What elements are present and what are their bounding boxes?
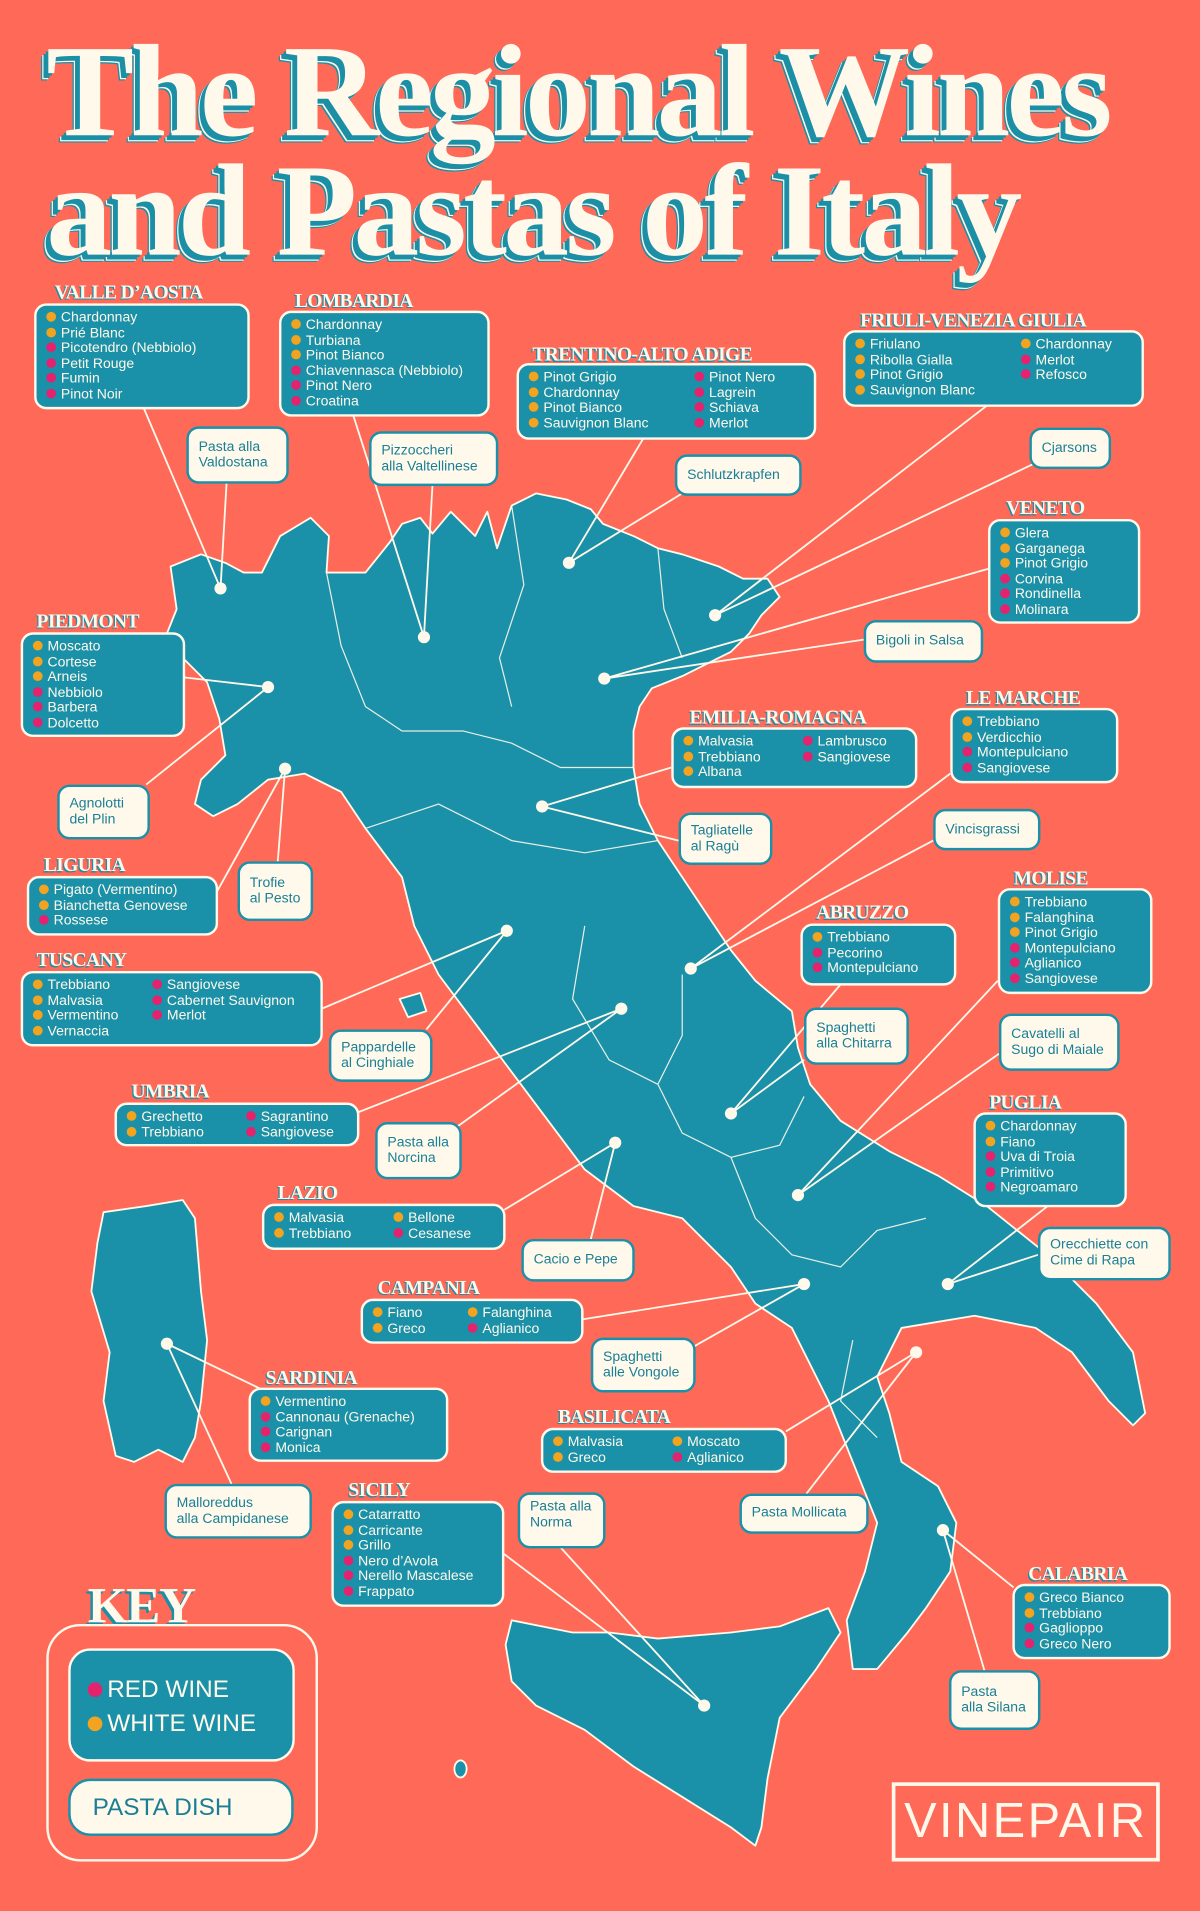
pasta: orecchiette: Cime di Rapa xyxy=(1050,1254,1135,1268)
pasta: chitarra: Spaghetti xyxy=(816,1020,875,1035)
pasta: pappardelle: al Cinghiale xyxy=(341,1056,414,1070)
title: The Regional Wines xyxy=(46,19,1109,164)
logo: vinepair xyxy=(892,1782,1160,1862)
panel: puglia: Primitivo xyxy=(1000,1165,1054,1180)
pasta: agnolotti xyxy=(57,785,150,839)
pasta: malloreddus: alla Campidanese xyxy=(177,1511,289,1526)
pasta: trofie: Trofie xyxy=(250,875,285,890)
pasta: cjarsons: Cjarsons xyxy=(1042,440,1097,455)
panel: le marche: Trebbiano xyxy=(977,715,1040,730)
panel: le marche: Montepulciano xyxy=(977,746,1068,760)
panel: puglia: Chardonnay xyxy=(1000,1120,1077,1134)
panel: molise: Pinot Grigio xyxy=(1025,926,1098,941)
pasta: tagliatelle xyxy=(679,813,772,865)
panel: veneto: Garganega xyxy=(1015,542,1085,556)
pasta: valdostana: Valdostana xyxy=(199,455,268,470)
panel: lombardia: Chiavennasca (Nebbiolo) xyxy=(306,364,463,378)
panel: lombardia: Chardonnay xyxy=(306,318,382,333)
panel: molise: Falanghina xyxy=(1025,911,1094,925)
pasta: agnolotti: del Plin xyxy=(69,812,115,827)
panel: puglia: Fiano xyxy=(1000,1135,1035,1149)
panel: veneto: VENETO xyxy=(1006,498,1085,519)
panel: lombardia: Turbiana xyxy=(306,333,361,348)
panel: lombardia xyxy=(279,291,490,417)
panel: basilicata xyxy=(540,1407,787,1473)
pasta: norcina xyxy=(375,1122,462,1179)
panel: veneto: Glera xyxy=(1015,526,1049,541)
key: wine legend xyxy=(68,1648,295,1762)
panel: calabria: Greco Bianco xyxy=(1039,1591,1124,1606)
panel: sicily: Frappato xyxy=(358,1584,414,1599)
pasta: schlutzkrapfen xyxy=(675,454,802,496)
pasta: cavatelli: Sugo di Maiale xyxy=(1011,1042,1104,1057)
panel: trentino-alto adige: Merlot xyxy=(709,416,748,431)
panel: molise: Sangiovese xyxy=(1025,972,1098,986)
pasta: norcina: Pasta alla xyxy=(387,1135,449,1149)
panel: sardinia xyxy=(248,1368,448,1462)
panel: lazio: Malvasia xyxy=(289,1211,344,1226)
pasta: silana: Pasta xyxy=(961,1684,997,1699)
panel: lombardia: LOMBARDIA xyxy=(295,291,413,312)
panel: tuscany: Malvasia xyxy=(48,993,103,1008)
panel: abruzzo: Pecorino xyxy=(827,946,883,961)
panel: lazio xyxy=(262,1183,506,1250)
panel: tuscany: Vernaccia xyxy=(48,1024,109,1039)
panel: campania: CAMPANIA xyxy=(378,1278,480,1299)
panel: sicily: Nero d’Avola xyxy=(358,1554,438,1569)
panel: emilia-romagna xyxy=(671,708,918,788)
key: pasta dish: PASTA DISH xyxy=(93,1795,232,1821)
panel: veneto: Molinara xyxy=(1015,602,1069,617)
key: wine legend: WHITE WINE xyxy=(107,1710,256,1737)
panel: calabria: Gaglioppo xyxy=(1039,1622,1103,1636)
panel: abruzzo: Montepulciano xyxy=(827,961,918,976)
pasta: tagliatelle: al Ragù xyxy=(691,839,739,853)
pasta: cacio e pepe: Cacio e Pepe xyxy=(534,1252,618,1267)
panel: molise: MOLISE xyxy=(1014,869,1088,889)
panel: emilia-romagna: EMILIA-ROMAGNA xyxy=(690,708,866,729)
pasta: vincisgrassi: Vincisgrassi xyxy=(945,822,1020,836)
panel: piedmont: Cortese xyxy=(48,655,97,669)
panel: basilicata: BASILICATA xyxy=(558,1407,670,1428)
panel: trentino-alto adige: Pinot Nero xyxy=(709,370,775,385)
panel: tuscany xyxy=(20,950,323,1046)
pasta: malloreddus: Malloreddus xyxy=(177,1495,253,1510)
pasta: cavatelli xyxy=(999,1014,1120,1071)
panel: friuli-venezia giulia: Merlot xyxy=(1036,353,1074,367)
pasta: norma xyxy=(518,1492,605,1548)
panel: basilicata: Malvasia xyxy=(568,1435,623,1450)
title xyxy=(41,19,1110,290)
pasta: cjarsons xyxy=(1029,428,1111,469)
panel: piedmont: Barbera xyxy=(48,701,97,715)
panel: calabria: Trebbiano xyxy=(1039,1606,1102,1621)
panel: sicily: Catarratto xyxy=(358,1508,420,1523)
panel: valle d'aosta: Fumin xyxy=(61,372,100,386)
panel: piedmont: Moscato xyxy=(48,640,100,654)
panel: piedmont xyxy=(20,612,186,737)
pasta: mollicata: Pasta Mollicata xyxy=(752,1506,847,1520)
panel: tuscany: Vermentino xyxy=(48,1009,118,1023)
panel: calabria: CALABRIA xyxy=(1028,1564,1127,1585)
pasta: orecchiette xyxy=(1038,1227,1171,1280)
panel: tuscany: Merlot xyxy=(167,1009,206,1023)
panel: sicily: SICILY xyxy=(348,1480,410,1501)
pasta: norma: Pasta alla xyxy=(530,1500,591,1514)
panel: tuscany: Sangiovese xyxy=(167,978,240,993)
panel: campania xyxy=(360,1278,584,1344)
panel: sicily: Grillo xyxy=(358,1539,391,1553)
panel: molise: Montepulciano xyxy=(1025,941,1116,956)
panel: umbria: UMBRIA xyxy=(132,1082,209,1103)
pasta: silana xyxy=(949,1670,1040,1730)
panel: piedmont: PIEDMONT xyxy=(37,612,139,632)
pasta: bigoli xyxy=(864,620,983,663)
pasta: norcina: Norcina xyxy=(387,1151,436,1165)
key xyxy=(46,1579,318,1862)
panel: lombardia: Pinot Nero xyxy=(306,379,372,394)
panel: sardinia: Vermentino xyxy=(275,1395,346,1410)
pasta: orecchiette: Orecchiette con xyxy=(1050,1238,1148,1252)
panel: friuli-venezia giulia: Ribolla Gialla xyxy=(870,353,952,367)
panel: piedmont: Nebbiolo xyxy=(48,685,103,700)
pasta: pizzoccheri xyxy=(369,431,498,486)
panel: veneto xyxy=(988,498,1140,624)
panel: emilia-romagna: Lambrusco xyxy=(817,735,887,749)
panel: le marche xyxy=(950,688,1118,784)
panel: liguria: Pigato (Vermentino) xyxy=(54,883,177,898)
panel: abruzzo xyxy=(800,903,956,986)
panel: campania: Falanghina xyxy=(482,1306,552,1321)
panel: trentino-alto adige: Pinot Grigio xyxy=(543,370,617,385)
panel: lazio: Trebbiano xyxy=(289,1226,351,1241)
panel: veneto: Pinot Grigio xyxy=(1015,557,1088,571)
panel: basilicata: Moscato xyxy=(687,1435,740,1450)
panel: liguria: Rossese xyxy=(54,914,108,928)
panel: valle d'aosta: VALLE D’AOSTA xyxy=(55,283,203,303)
logo: vinepair: VINEPAIR xyxy=(904,1795,1147,1848)
panel: lazio: Cesanese xyxy=(408,1226,471,1241)
pasta: norma: Norma xyxy=(530,1516,572,1530)
pasta: cavatelli: Cavatelli al xyxy=(1011,1026,1080,1041)
panel: emilia-romagna: Albana xyxy=(698,765,742,780)
key: pasta dish xyxy=(68,1779,294,1836)
pasta: vongole xyxy=(591,1338,696,1392)
panel: sardinia: SARDINIA xyxy=(266,1368,357,1389)
panel: umbria: Sagrantino xyxy=(261,1110,328,1124)
panel: calabria xyxy=(1012,1564,1171,1660)
panel: valle d'aosta xyxy=(34,283,250,410)
pasta: schlutzkrapfen: Schlutzkrapfen xyxy=(687,467,780,482)
panel: sardinia: Cannonau (Grenache) xyxy=(275,1410,415,1425)
panel: friuli-venezia giulia: Sauvignon Blanc xyxy=(870,383,975,398)
panel: tuscany: Cabernet Sauvignon xyxy=(167,993,295,1008)
pasta: pappardelle xyxy=(329,1029,432,1082)
panel: basilicata: Aglianico xyxy=(687,1450,744,1465)
panel: puglia: Negroamaro xyxy=(1000,1181,1078,1195)
panel: liguria: Bianchetta Genovese xyxy=(54,898,188,913)
panel: molise xyxy=(998,869,1152,994)
panel: friuli-venezia giulia: Refosco xyxy=(1036,368,1087,383)
panel: le marche: Verdicchio xyxy=(977,730,1042,745)
panel: abruzzo: ABRUZZO xyxy=(816,903,908,923)
panel: sicily: Nerello Mascalese xyxy=(358,1569,473,1584)
panel: valle d'aosta: Pinot Noir xyxy=(61,387,122,401)
panel: trentino-alto adige: Chardonnay xyxy=(543,386,620,400)
pasta: chitarra xyxy=(804,1008,909,1065)
panel: friuli-venezia giulia: Friulano xyxy=(870,337,920,352)
pasta: vongole: Spaghetti xyxy=(603,1349,662,1364)
panel: trentino-alto adige xyxy=(516,345,816,440)
pasta: pappardelle: Pappardelle xyxy=(341,1040,416,1054)
panel: trentino-alto adige: Pinot Bianco xyxy=(543,401,622,415)
pasta: mollicata xyxy=(739,1494,869,1534)
panel: umbria: Grechetto xyxy=(141,1110,203,1124)
panel: trentino-alto adige: Sauvignon Blanc xyxy=(543,416,649,431)
panel: tuscany: Trebbiano xyxy=(48,978,110,993)
pasta: vongole: alle Vongole xyxy=(603,1365,679,1380)
pasta: pizzoccheri: Pizzoccheri xyxy=(381,443,453,457)
panel: emilia-romagna: Malvasia xyxy=(698,735,753,749)
panel: umbria: Sangiovese xyxy=(261,1125,334,1140)
pasta: cacio e pepe xyxy=(521,1239,635,1282)
panel: molise: Aglianico xyxy=(1025,956,1081,971)
panel: campania: Fiano xyxy=(387,1306,422,1321)
pasta: silana: alla Silana xyxy=(961,1700,1026,1715)
panel: friuli-venezia giulia: Pinot Grigio xyxy=(870,368,943,383)
panel: trentino-alto adige: Lagrein xyxy=(709,386,756,400)
panel: liguria: LIGURIA xyxy=(44,855,125,876)
pasta: valdostana xyxy=(186,426,289,484)
pasta: valdostana: Pasta alla xyxy=(199,439,260,454)
panel: valle d'aosta: Prié Blanc xyxy=(61,326,125,341)
pasta: pizzoccheri: alla Valtellinese xyxy=(381,459,478,473)
panel: sicily xyxy=(331,1480,504,1607)
key heading: KEY xyxy=(88,1579,195,1635)
panel: lazio: LAZIO xyxy=(278,1183,338,1204)
panel: friuli-venezia giulia: Chardonnay xyxy=(1036,337,1112,352)
panel: trentino-alto adige: Schiava xyxy=(709,401,759,415)
panel: valle d'aosta: Picotendro (Nebbiolo) xyxy=(61,341,196,356)
panel: piedmont: Arneis xyxy=(48,670,87,685)
panel: piedmont: Dolcetto xyxy=(48,716,99,730)
key: wine legend: RED WINE xyxy=(107,1676,229,1703)
pasta: trofie: al Pesto xyxy=(250,891,300,906)
panel: umbria: Trebbiano xyxy=(141,1125,204,1140)
panel: campania: Greco xyxy=(387,1321,426,1336)
panel: le marche: Sangiovese xyxy=(977,761,1050,775)
pasta: bigoli: Bigoli in Salsa xyxy=(876,634,964,648)
panel: puglia: Uva di Troia xyxy=(1000,1150,1075,1165)
panel: liguria xyxy=(26,855,218,936)
panel: molise: Trebbiano xyxy=(1025,895,1087,910)
panel: valle d'aosta: Petit Rouge xyxy=(61,356,134,371)
panel: emilia-romagna: Trebbiano xyxy=(698,750,761,764)
panel: veneto: Corvina xyxy=(1015,572,1063,587)
panel: lombardia: Croatina xyxy=(306,394,359,409)
panel: calabria: Greco Nero xyxy=(1039,1637,1112,1651)
panel: puglia xyxy=(973,1093,1127,1208)
pasta: vincisgrassi xyxy=(933,809,1040,850)
panel: sardinia: Monica xyxy=(275,1441,321,1455)
panel: tuscany: TUSCANY xyxy=(37,950,127,971)
pasta: chitarra: alla Chitarra xyxy=(816,1036,892,1051)
panel: puglia: PUGLIA xyxy=(989,1093,1061,1113)
panel: friuli-venezia giulia xyxy=(843,311,1144,407)
panel: lazio: Bellone xyxy=(408,1211,455,1226)
panel: umbria xyxy=(114,1082,360,1146)
pasta: agnolotti: Agnolotti xyxy=(69,796,124,811)
panel: le marche: LE MARCHE xyxy=(966,688,1080,709)
pasta: trofie xyxy=(238,861,313,921)
panel: emilia-romagna: Sangiovese xyxy=(817,750,891,764)
pasta: malloreddus xyxy=(164,1484,312,1539)
panel: valle d'aosta: Chardonnay xyxy=(61,311,137,325)
panel: trentino-alto adige: TRENTINO-ALTO ADIGE xyxy=(532,345,752,365)
pasta: tagliatelle: Tagliatelle xyxy=(691,823,753,838)
panel: campania: Aglianico xyxy=(482,1321,539,1336)
title: and Pastas of Italy xyxy=(46,139,1019,284)
panel: sicily: Carricante xyxy=(358,1523,423,1538)
panel: friuli-venezia giulia: FRIULI-VENEZIA GIULIA xyxy=(860,311,1086,331)
panel: veneto: Rondinella xyxy=(1015,587,1081,602)
panel: sardinia: Carignan xyxy=(275,1425,332,1440)
panel: lombardia: Pinot Bianco xyxy=(306,348,384,363)
panel: basilicata: Greco xyxy=(568,1450,606,1465)
panel: abruzzo: Trebbiano xyxy=(827,931,890,945)
